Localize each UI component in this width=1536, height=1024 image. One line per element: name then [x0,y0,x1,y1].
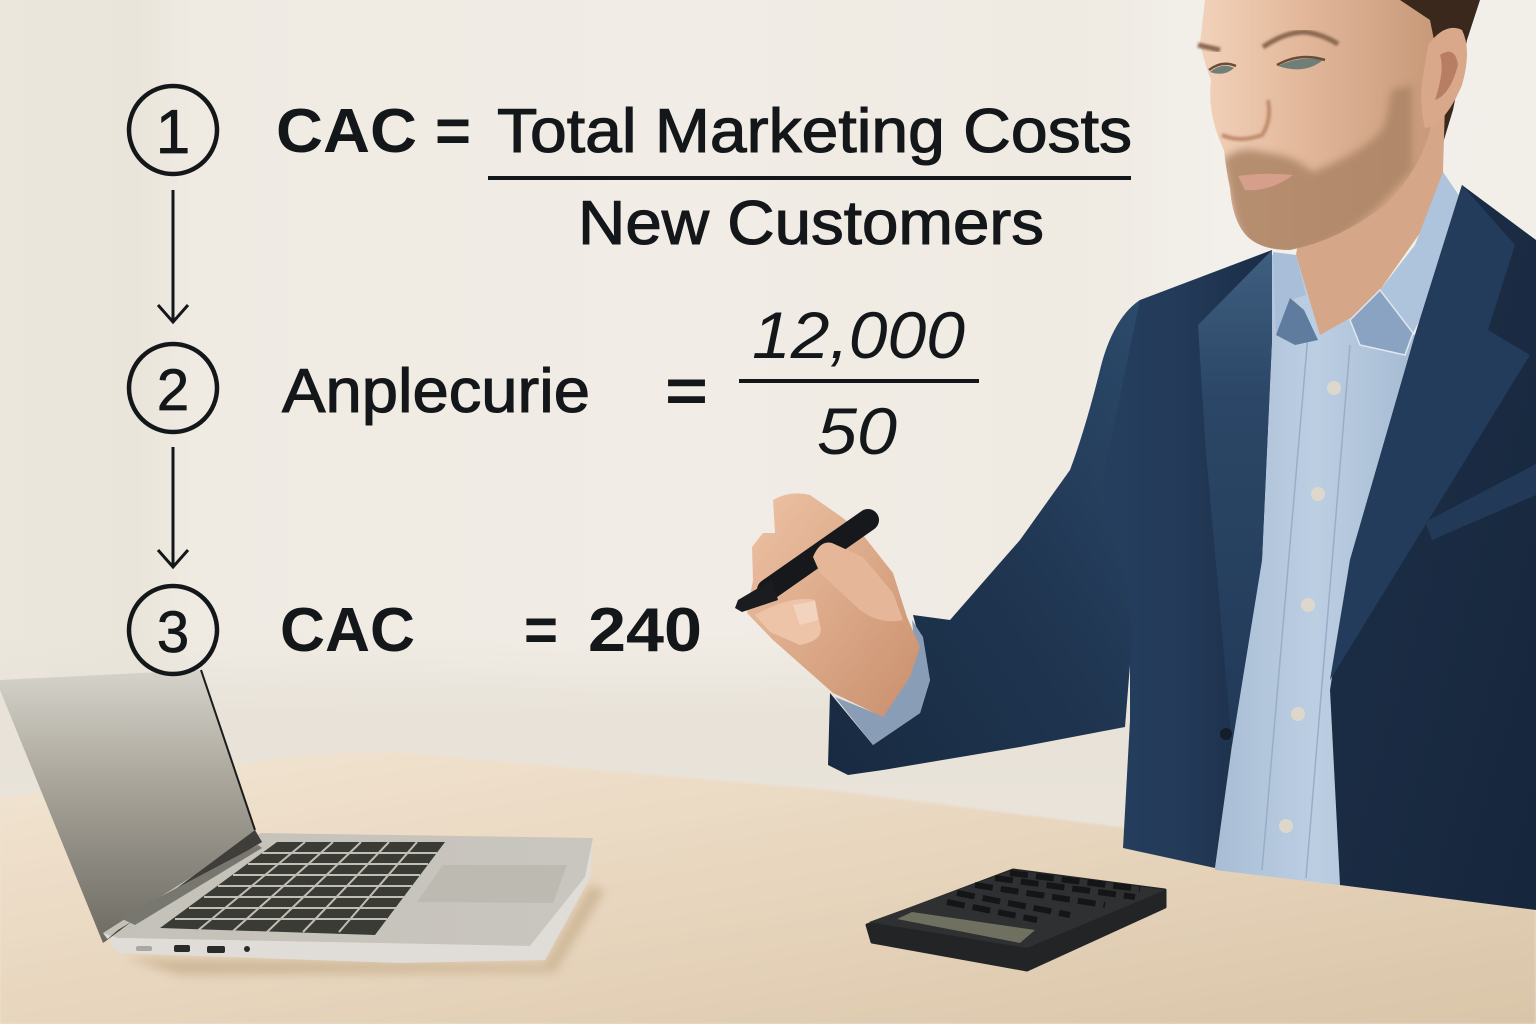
step 2 marker [129,344,217,432]
formula line 2: 50 [817,394,897,468]
hand [747,493,920,717]
nose shadow [1222,100,1269,139]
ports [136,945,250,953]
beard [1223,85,1412,255]
formula line 2: 12,000 [752,298,965,372]
formula line 3: 240 [588,596,702,665]
eyebrows [1198,32,1338,50]
front edge [103,840,593,963]
step 3 marker: 3 [157,600,189,665]
jacket left body [1098,250,1272,868]
thumb [813,543,903,621]
neck [1296,105,1447,340]
base top [103,833,593,946]
keyboard [160,842,445,935]
formula line 3: = [524,596,558,665]
jacket button [1220,728,1232,740]
calculator keys [947,873,1140,920]
hair behind ear [1370,0,1480,143]
step 2 marker: 2 [157,358,189,423]
formula line 3: CAC [280,596,415,665]
right lapel [1330,185,1530,680]
jacket right body [1330,185,1536,910]
eyes [1209,57,1325,74]
screen [0,670,255,943]
step 3 marker [129,586,217,674]
calculator display [897,912,1035,943]
formula line 2 [282,298,979,468]
formula line 2: Anplecurie [282,357,590,426]
calculator [867,870,1165,970]
formula line 1: Total Marketing Costs [497,97,1132,166]
arm sleeve [828,300,1140,775]
step 1 marker: 1 [156,98,190,167]
formula line 1: CAC [276,97,417,166]
head [1198,0,1440,255]
formula line 1 [276,97,1132,258]
shirt cuff [835,620,930,745]
collar [1273,172,1462,355]
fingers [755,599,821,645]
pocket [1425,464,1536,540]
trackpad [417,865,567,903]
shirt [1215,255,1415,885]
step 1 marker [129,86,217,174]
left lapel [1198,250,1272,745]
formula line 2: = [665,357,708,426]
ear [1421,28,1467,128]
laptop shadow [125,885,605,975]
shirt buttons [1279,381,1341,833]
person [735,0,1536,910]
arrow: step 2 to step 3 [158,447,188,567]
pen [735,520,868,612]
lips [1238,174,1293,190]
hinge [103,830,262,943]
table [0,752,1536,1024]
arrow: step 1 to step 2 [158,190,188,322]
formula line 1: = [435,97,471,166]
formula line 3 [280,596,702,665]
formula line 1: New Customers [578,189,1044,258]
laptop [0,670,605,975]
shirt placket [1262,335,1350,878]
